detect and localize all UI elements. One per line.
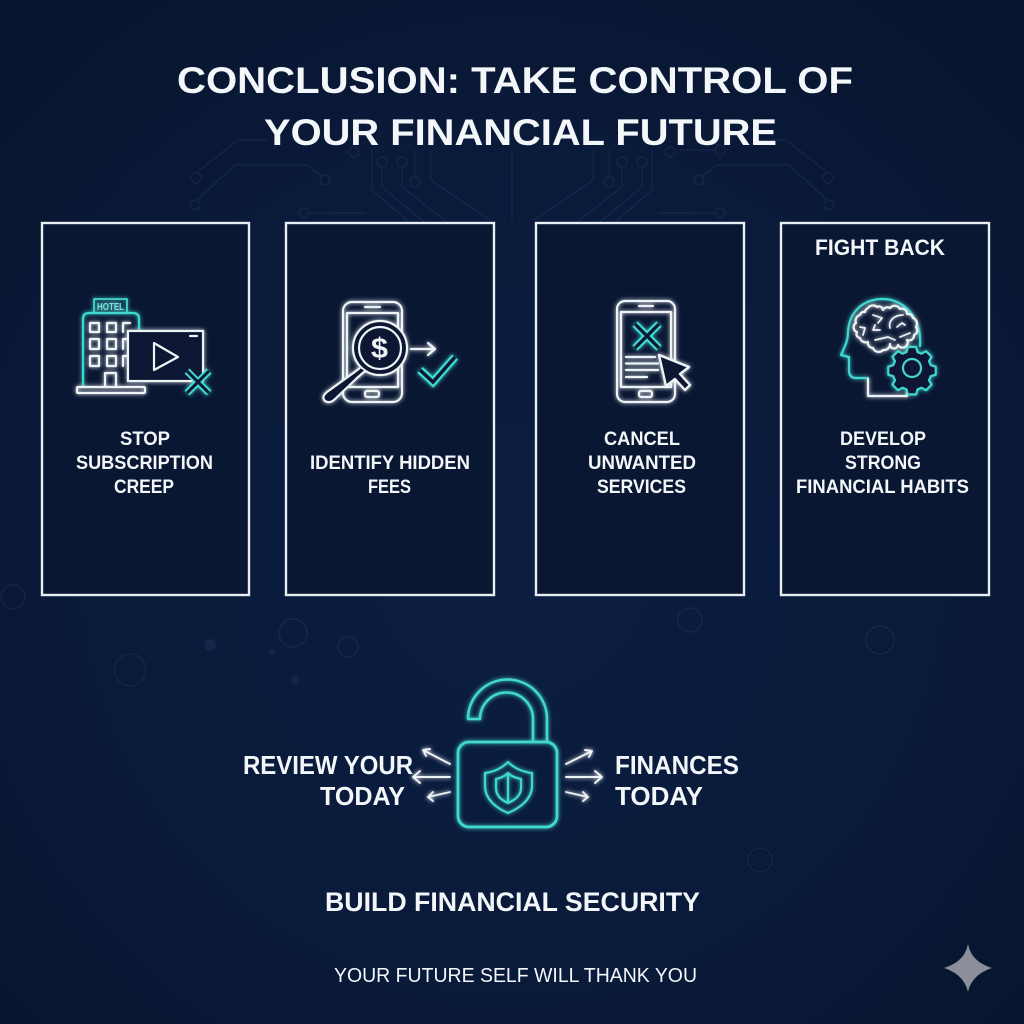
label (76, 429, 213, 498)
label: UNWANTED (588, 453, 696, 474)
panel: develop strong financial habits (781, 223, 989, 595)
label: FINANCIAL HABITS (796, 477, 969, 498)
icon: phone with cross and cursor (617, 301, 690, 402)
icon: head with brain and gear (841, 299, 936, 396)
right text: TODAY (615, 781, 703, 811)
arrows (413, 749, 602, 801)
panel: cancel unwanted services (536, 223, 744, 595)
label (310, 453, 470, 498)
title (177, 60, 853, 153)
label: IDENTIFY HIDDEN (310, 453, 470, 474)
icon: phone with magnifier and check (323, 302, 455, 402)
subheading: BUILD FINANCIAL SECURITY (325, 887, 700, 917)
label: DEVELOP (840, 429, 926, 450)
label (796, 429, 969, 498)
heading: fight back: FIGHT BACK (815, 235, 945, 260)
title: CONCLUSION: TAKE CONTROL OF (177, 60, 853, 101)
call to action: review your finances today (243, 680, 739, 827)
icon: hotel and video with cross (77, 299, 209, 393)
label: STOP (120, 429, 170, 450)
icon: sparkle watermark (944, 944, 992, 992)
label: CANCEL (604, 429, 680, 450)
icon: open padlock with shield (458, 680, 557, 827)
label (588, 429, 696, 498)
closing line: YOUR FUTURE SELF WILL THANK YOU (334, 965, 697, 987)
left text: TODAY (320, 781, 405, 811)
right text: FINANCES (615, 750, 739, 780)
label: FEES (368, 477, 411, 498)
left text (243, 750, 413, 811)
label: SUBSCRIPTION (76, 453, 213, 474)
icon: phone with magnifier and check: $ (371, 333, 388, 365)
label: CREEP (114, 477, 174, 498)
icon: hotel and video with cross: HOTEL (97, 301, 124, 313)
label: SERVICES (597, 477, 686, 498)
title: YOUR FINANCIAL FUTURE (264, 112, 777, 153)
panel: stop subscription creep (42, 223, 249, 595)
panel: identify hidden fees (286, 223, 494, 595)
label: STRONG (845, 453, 921, 474)
right text (615, 750, 739, 811)
circuit pattern background (1, 140, 894, 872)
left text: REVIEW YOUR (243, 750, 413, 780)
